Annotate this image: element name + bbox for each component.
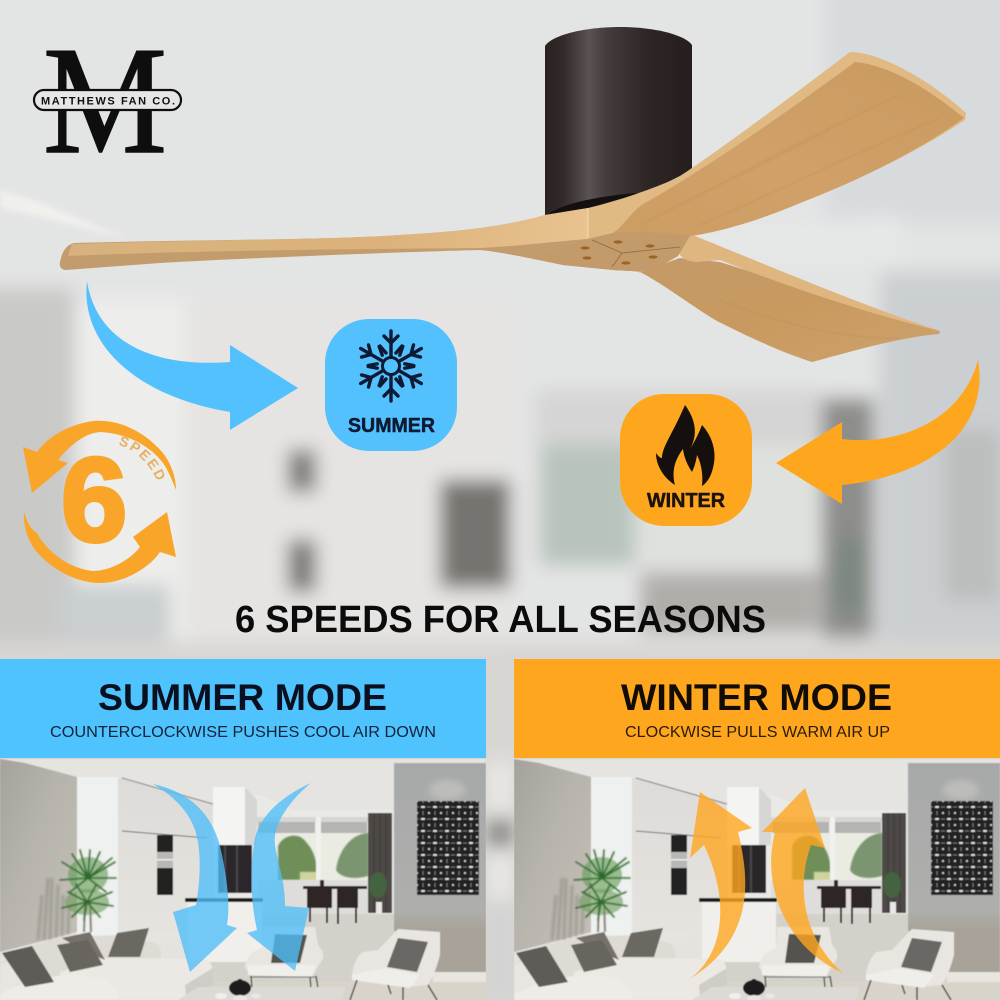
- summer heading: SUMMER MODE: [98, 677, 387, 718]
- winter heading: WINTER MODE: [621, 677, 892, 718]
- icon: 6 speed badge: [23, 420, 176, 583]
- numeral 6: 6: [61, 434, 127, 567]
- arrow: right warm air flow: [762, 788, 843, 973]
- fan canopy: [545, 27, 692, 216]
- curved SPEED label: SPEED: [119, 436, 164, 480]
- winter label: WINTER: [647, 490, 726, 512]
- arrow: blue summer airflow: [86, 281, 298, 430]
- winter room scene: [514, 759, 1000, 1000]
- lower circular arrow: [24, 512, 176, 583]
- summer tile: [325, 319, 457, 451]
- fan blade: left: [60, 208, 650, 272]
- winter header band: [514, 659, 1000, 758]
- icon: flame: [656, 405, 714, 486]
- mounting screw holes: [580, 240, 658, 265]
- summer description: COUNTERCLOCKWISE PUSHES COOL AIR DOWN: [50, 724, 436, 741]
- arrow: left cool air flow: [153, 784, 237, 972]
- logo monogram M: M: [43, 16, 167, 186]
- logo: Matthews Fan Co.: [34, 16, 181, 186]
- icon: snowflake: [355, 331, 427, 401]
- logo name badge: [34, 90, 181, 110]
- summer room scene: [0, 759, 486, 1000]
- upper circular arrow: [23, 421, 176, 493]
- winter tile: [620, 394, 752, 526]
- panel: summer mode: [0, 659, 486, 1000]
- arrow: orange winter airflow: [776, 360, 980, 504]
- wood grain: [640, 95, 940, 338]
- panel: winter mode: [514, 659, 1000, 1000]
- winter description: CLOCKWISE PULLS WARM AIR UP: [625, 724, 890, 741]
- logo name badge: MATTHEWS FAN CO.: [41, 96, 175, 108]
- fan blade: lower right: [640, 234, 940, 362]
- summer label: SUMMER: [348, 415, 436, 437]
- fan blade: upper right: [530, 52, 966, 273]
- ceiling fan: [60, 27, 966, 362]
- arrow: left warm air flow: [688, 792, 752, 980]
- summer header band: [0, 659, 486, 758]
- arrow: right cool air flow: [247, 783, 311, 971]
- title: 6 SPEEDS FOR ALL SEASONS: [235, 599, 766, 641]
